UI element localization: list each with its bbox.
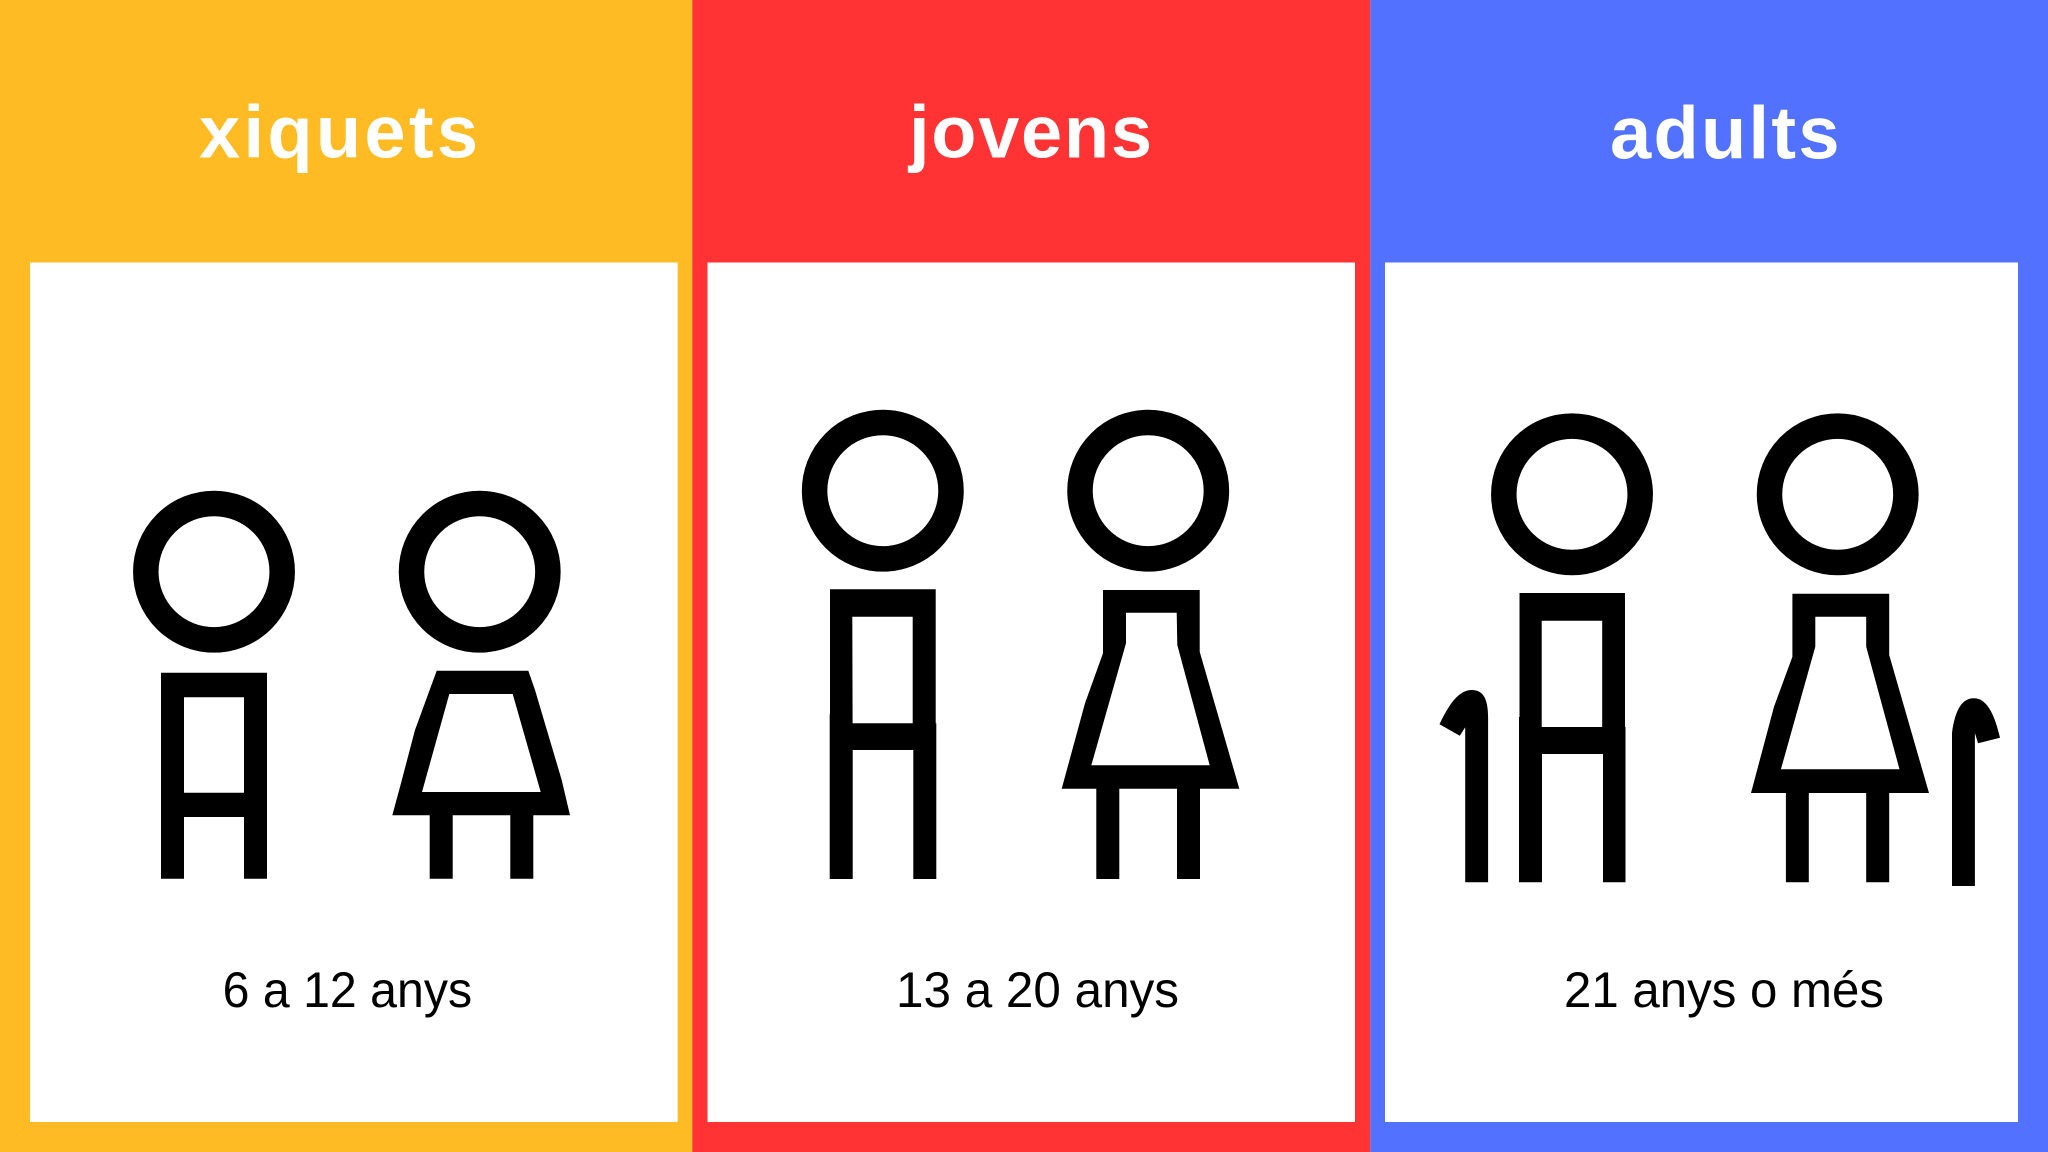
icon: boy [146,504,282,879]
white card [1385,262,2018,1122]
panel: xiquets [0,0,692,1152]
icon: young man [815,422,951,879]
white card [708,262,1355,1122]
blue background [1370,0,2048,1152]
icon: man [1504,426,1640,882]
label: 6 a 12 anys: 6 a 12 anys [223,962,472,1018]
icon: right walking cane [1952,698,2000,886]
yellow background [0,0,692,1152]
red background [692,0,1370,1152]
white card [30,262,678,1122]
heading: jovens: jovens [907,91,1152,174]
icon: woman [1751,426,1929,882]
icon: young woman [1062,422,1239,879]
label: 21 anys o més: 21 anys o més [1564,962,1884,1018]
panel: jovens [692,0,1370,1152]
heading: xiquets: xiquets [199,91,478,174]
label: 13 a 20 anys: 13 a 20 anys [896,962,1179,1018]
panel: adults [1370,0,2048,1152]
heading: adults: adults [1610,92,1840,174]
icon: left walking cane [1440,690,1488,882]
icon: girl [392,504,570,879]
